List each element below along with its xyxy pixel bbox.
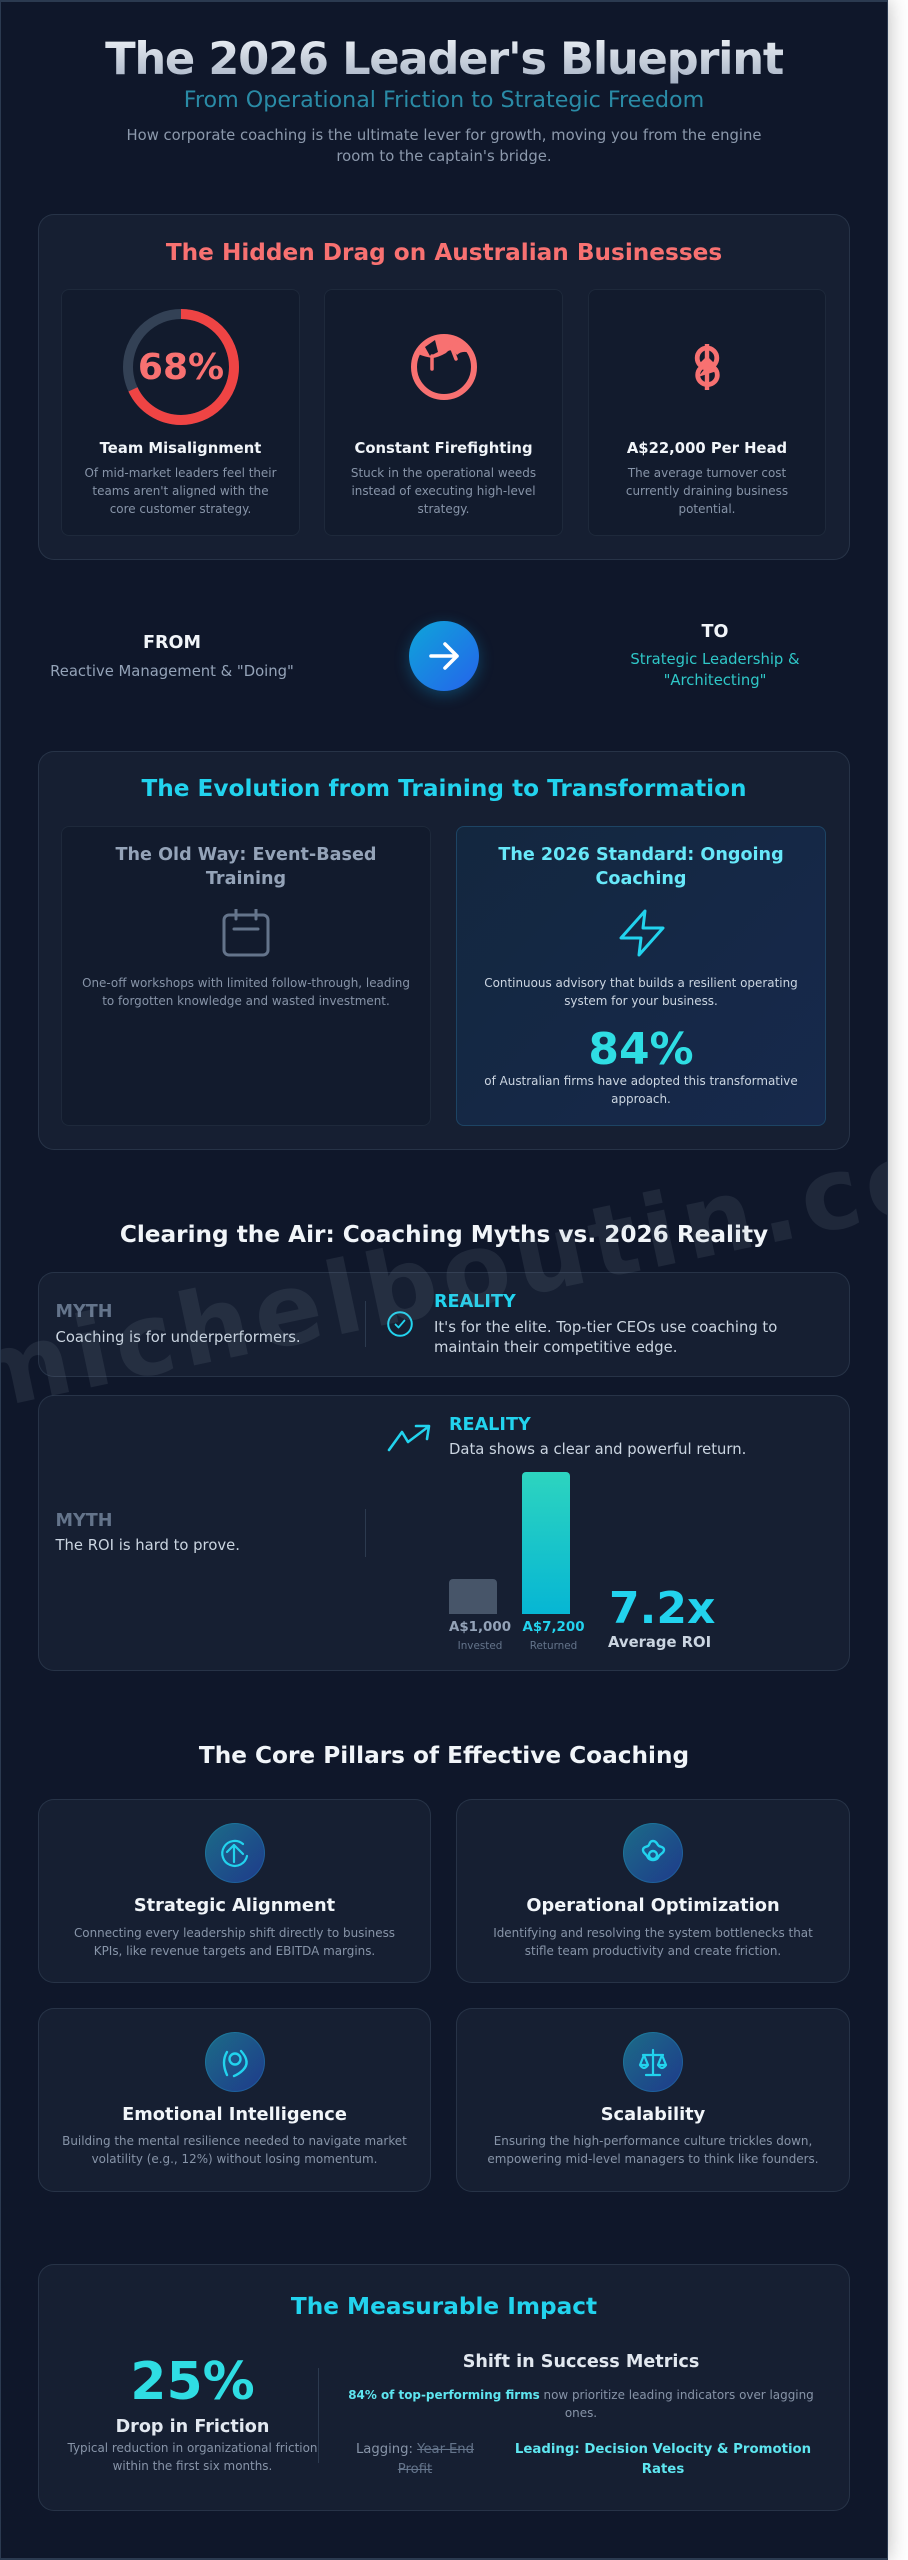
column title: Training — [206, 869, 286, 889]
stat description: currently draining business — [626, 484, 788, 498]
stat: 7.2x: 7.2x — [609, 1583, 715, 1634]
stat description — [626, 466, 788, 516]
leading metric: Rates — [642, 2462, 684, 2477]
stat caption: Average ROI — [608, 1634, 711, 1651]
stat caption — [484, 1074, 798, 1106]
stat description: teams aren't aligned with the — [92, 484, 269, 498]
reality label: REALITY — [434, 1292, 516, 1312]
pillar text — [74, 1926, 395, 1958]
metrics text: 84% of top-performing firms now prioritize leading indicators over lagging — [348, 2388, 814, 2402]
stat card: team misalignment — [61, 289, 300, 536]
leading metric: Leading: Decision Velocity & Promotion — [515, 2442, 811, 2457]
pillar text: empowering mid-level managers to think like founders. — [487, 2152, 819, 2166]
stat title: Constant Firefighting — [354, 440, 533, 457]
pillar text: Building the mental resilience needed to navigate market — [62, 2134, 407, 2148]
metrics title: Shift in Success Metrics — [463, 2352, 699, 2372]
to text: Strategic Leadership & — [630, 651, 800, 668]
stat title: Drop in Friction — [116, 2417, 269, 2437]
stat title: A$22,000 Per Head — [627, 440, 787, 457]
column: old way — [61, 826, 431, 1126]
myth label: MYTH — [56, 1302, 112, 1322]
lagging metric: Lagging: Year-End — [356, 2442, 474, 2457]
from block — [50, 633, 294, 680]
pillar text: Connecting every leadership shift directly to business — [74, 1926, 395, 1940]
icon: trending up — [388, 1424, 430, 1452]
donut chart: 68% — [123, 309, 239, 425]
pillar text: stifle team productivity and create friction. — [525, 1944, 781, 1958]
reality text: It's for the elite. Top-tier CEOs use coaching to — [434, 1318, 777, 1336]
pillar text: volatility (e.g., 12%) without losing momentum. — [92, 2152, 377, 2166]
pillar title: Operational Optimization — [526, 1895, 780, 1916]
caption: returned: Returned — [530, 1640, 577, 1652]
pillar card: strategic alignment — [38, 1799, 431, 1983]
heading: hidden drag: The Hidden Drag on Australian Businesses — [166, 239, 722, 266]
icon: gear — [623, 1823, 683, 1883]
column text: One-off workshops with limited follow-through, leading — [82, 976, 410, 990]
pillar text: Ensuring the high-performance culture trickles down, — [494, 2134, 812, 2148]
panel: evolution — [38, 751, 850, 1150]
title: The 2026 Leader's Blueprint — [105, 32, 783, 85]
stat text: Typical reduction in organizational friction — [68, 2441, 317, 2455]
stat description: strategy. — [418, 502, 469, 516]
bar chart: roi — [449, 1472, 585, 1652]
icon: bolt — [619, 910, 665, 956]
pillar text — [487, 2134, 819, 2166]
stat: 84%: 84% — [588, 1024, 694, 1075]
column text: to forgotten knowledge and wasted investment. — [102, 994, 390, 1008]
stat text: within the first six months. — [113, 2459, 272, 2473]
stat description: instead of executing high-level — [351, 484, 536, 498]
heading: myths: Clearing the Air: Coaching Myths vs. 2026 Reality — [120, 1221, 768, 1248]
reality text: maintain their competitive edge. — [434, 1339, 677, 1356]
stat description: potential. — [679, 502, 735, 516]
stat card: constant firefighting — [324, 289, 563, 536]
column title: The Old Way: Event-Based — [116, 845, 376, 865]
panel: myth 1 — [38, 1272, 850, 1377]
stat description: Of mid-market leaders feel their — [84, 466, 277, 480]
pillar text: KPIs, like revenue targets and EBITDA margins. — [94, 1944, 375, 1958]
pillar text: Identifying and resolving the system bottlenecks that — [493, 1926, 813, 1940]
intro text: room to the captain's bridge. — [336, 148, 552, 165]
leading metric — [515, 2442, 811, 2477]
bar: returned — [522, 1472, 570, 1614]
panel: measurable impact — [38, 2264, 850, 2511]
icon: target arrow — [204, 1823, 264, 1883]
column text — [82, 976, 410, 1008]
reality text: Data shows a clear and powerful return. — [449, 1441, 746, 1458]
from label: FROM — [143, 633, 201, 653]
intro text: How corporate coaching is the ultimate lever for growth, moving you from the engine — [127, 127, 761, 144]
icon: person — [204, 2032, 264, 2092]
stat description: core customer strategy. — [110, 502, 251, 516]
metrics text — [348, 2388, 814, 2420]
heading: evolution: The Evolution from Training to Transformation — [141, 775, 747, 802]
column text — [484, 976, 798, 1008]
to label: TO — [702, 622, 728, 642]
panel: hidden drag — [38, 214, 850, 560]
to text — [630, 651, 800, 689]
to text: "Architecting" — [664, 672, 766, 689]
pillar card: emotional intelligence — [38, 2008, 431, 2192]
icon: check circle — [387, 1311, 413, 1337]
panel: myth 2 — [38, 1395, 850, 1671]
label: invested value: A$1,000 — [449, 1620, 511, 1635]
intro text — [127, 127, 761, 165]
to block — [630, 622, 800, 689]
heading: pillars: The Core Pillars of Effective Coaching — [199, 1742, 689, 1769]
stat title: Team Misalignment — [100, 440, 261, 457]
stat description: The average turnover cost — [628, 466, 786, 480]
from text: Reactive Management & "Doing" — [50, 663, 294, 680]
lagging metric: Profit — [398, 2462, 432, 2477]
subtitle: From Operational Friction to Strategic Freedom — [184, 87, 704, 113]
reality text — [434, 1318, 777, 1356]
caption: invested: Invested — [458, 1640, 502, 1652]
icon: arrow circle — [409, 621, 479, 691]
stat: 25%: 25% — [130, 2352, 255, 2412]
myth label: MYTH — [56, 1511, 112, 1531]
reality label: REALITY — [449, 1415, 531, 1435]
myth text: The ROI is hard to prove. — [56, 1537, 240, 1554]
metrics text: ones. — [565, 2406, 597, 2420]
pillar text — [493, 1926, 813, 1958]
stat description — [84, 466, 277, 516]
stat caption: of Australian firms have adopted this transformative — [484, 1074, 798, 1088]
stat text — [68, 2441, 317, 2473]
column text: system for your business. — [564, 994, 718, 1008]
column title: The 2026 Standard: Ongoing — [498, 845, 784, 865]
column: 2026 standard — [456, 826, 826, 1126]
myth text: Coaching is for underperformers. — [56, 1329, 301, 1346]
pillar title: Emotional Intelligence — [122, 2104, 347, 2125]
stat caption: approach. — [611, 1092, 671, 1106]
pillar card: scalability — [456, 2008, 850, 2192]
icon: dollar — [694, 344, 720, 390]
stat card: turnover cost — [588, 289, 826, 536]
pillar title: Scalability — [601, 2104, 705, 2125]
label: returned value: A$7,200 — [522, 1620, 585, 1635]
icon: flame — [411, 334, 477, 400]
pillar text — [62, 2134, 407, 2166]
column title — [498, 845, 784, 889]
pillar card: operational optimization — [456, 1799, 850, 1983]
column title — [116, 845, 376, 889]
icon: calendar — [222, 909, 270, 956]
heading: impact: The Measurable Impact — [291, 2293, 597, 2320]
column title: Coaching — [596, 869, 686, 889]
lagging metric — [356, 2442, 474, 2477]
bar: invested — [449, 1579, 497, 1614]
pillar title: Strategic Alignment — [134, 1895, 335, 1916]
column text: Continuous advisory that builds a resilient operating — [484, 976, 798, 990]
donut chart: 68%: 68% — [138, 347, 224, 388]
stat description — [351, 466, 536, 516]
stat description: Stuck in the operational weeds — [351, 466, 536, 480]
icon: scales — [623, 2032, 683, 2092]
